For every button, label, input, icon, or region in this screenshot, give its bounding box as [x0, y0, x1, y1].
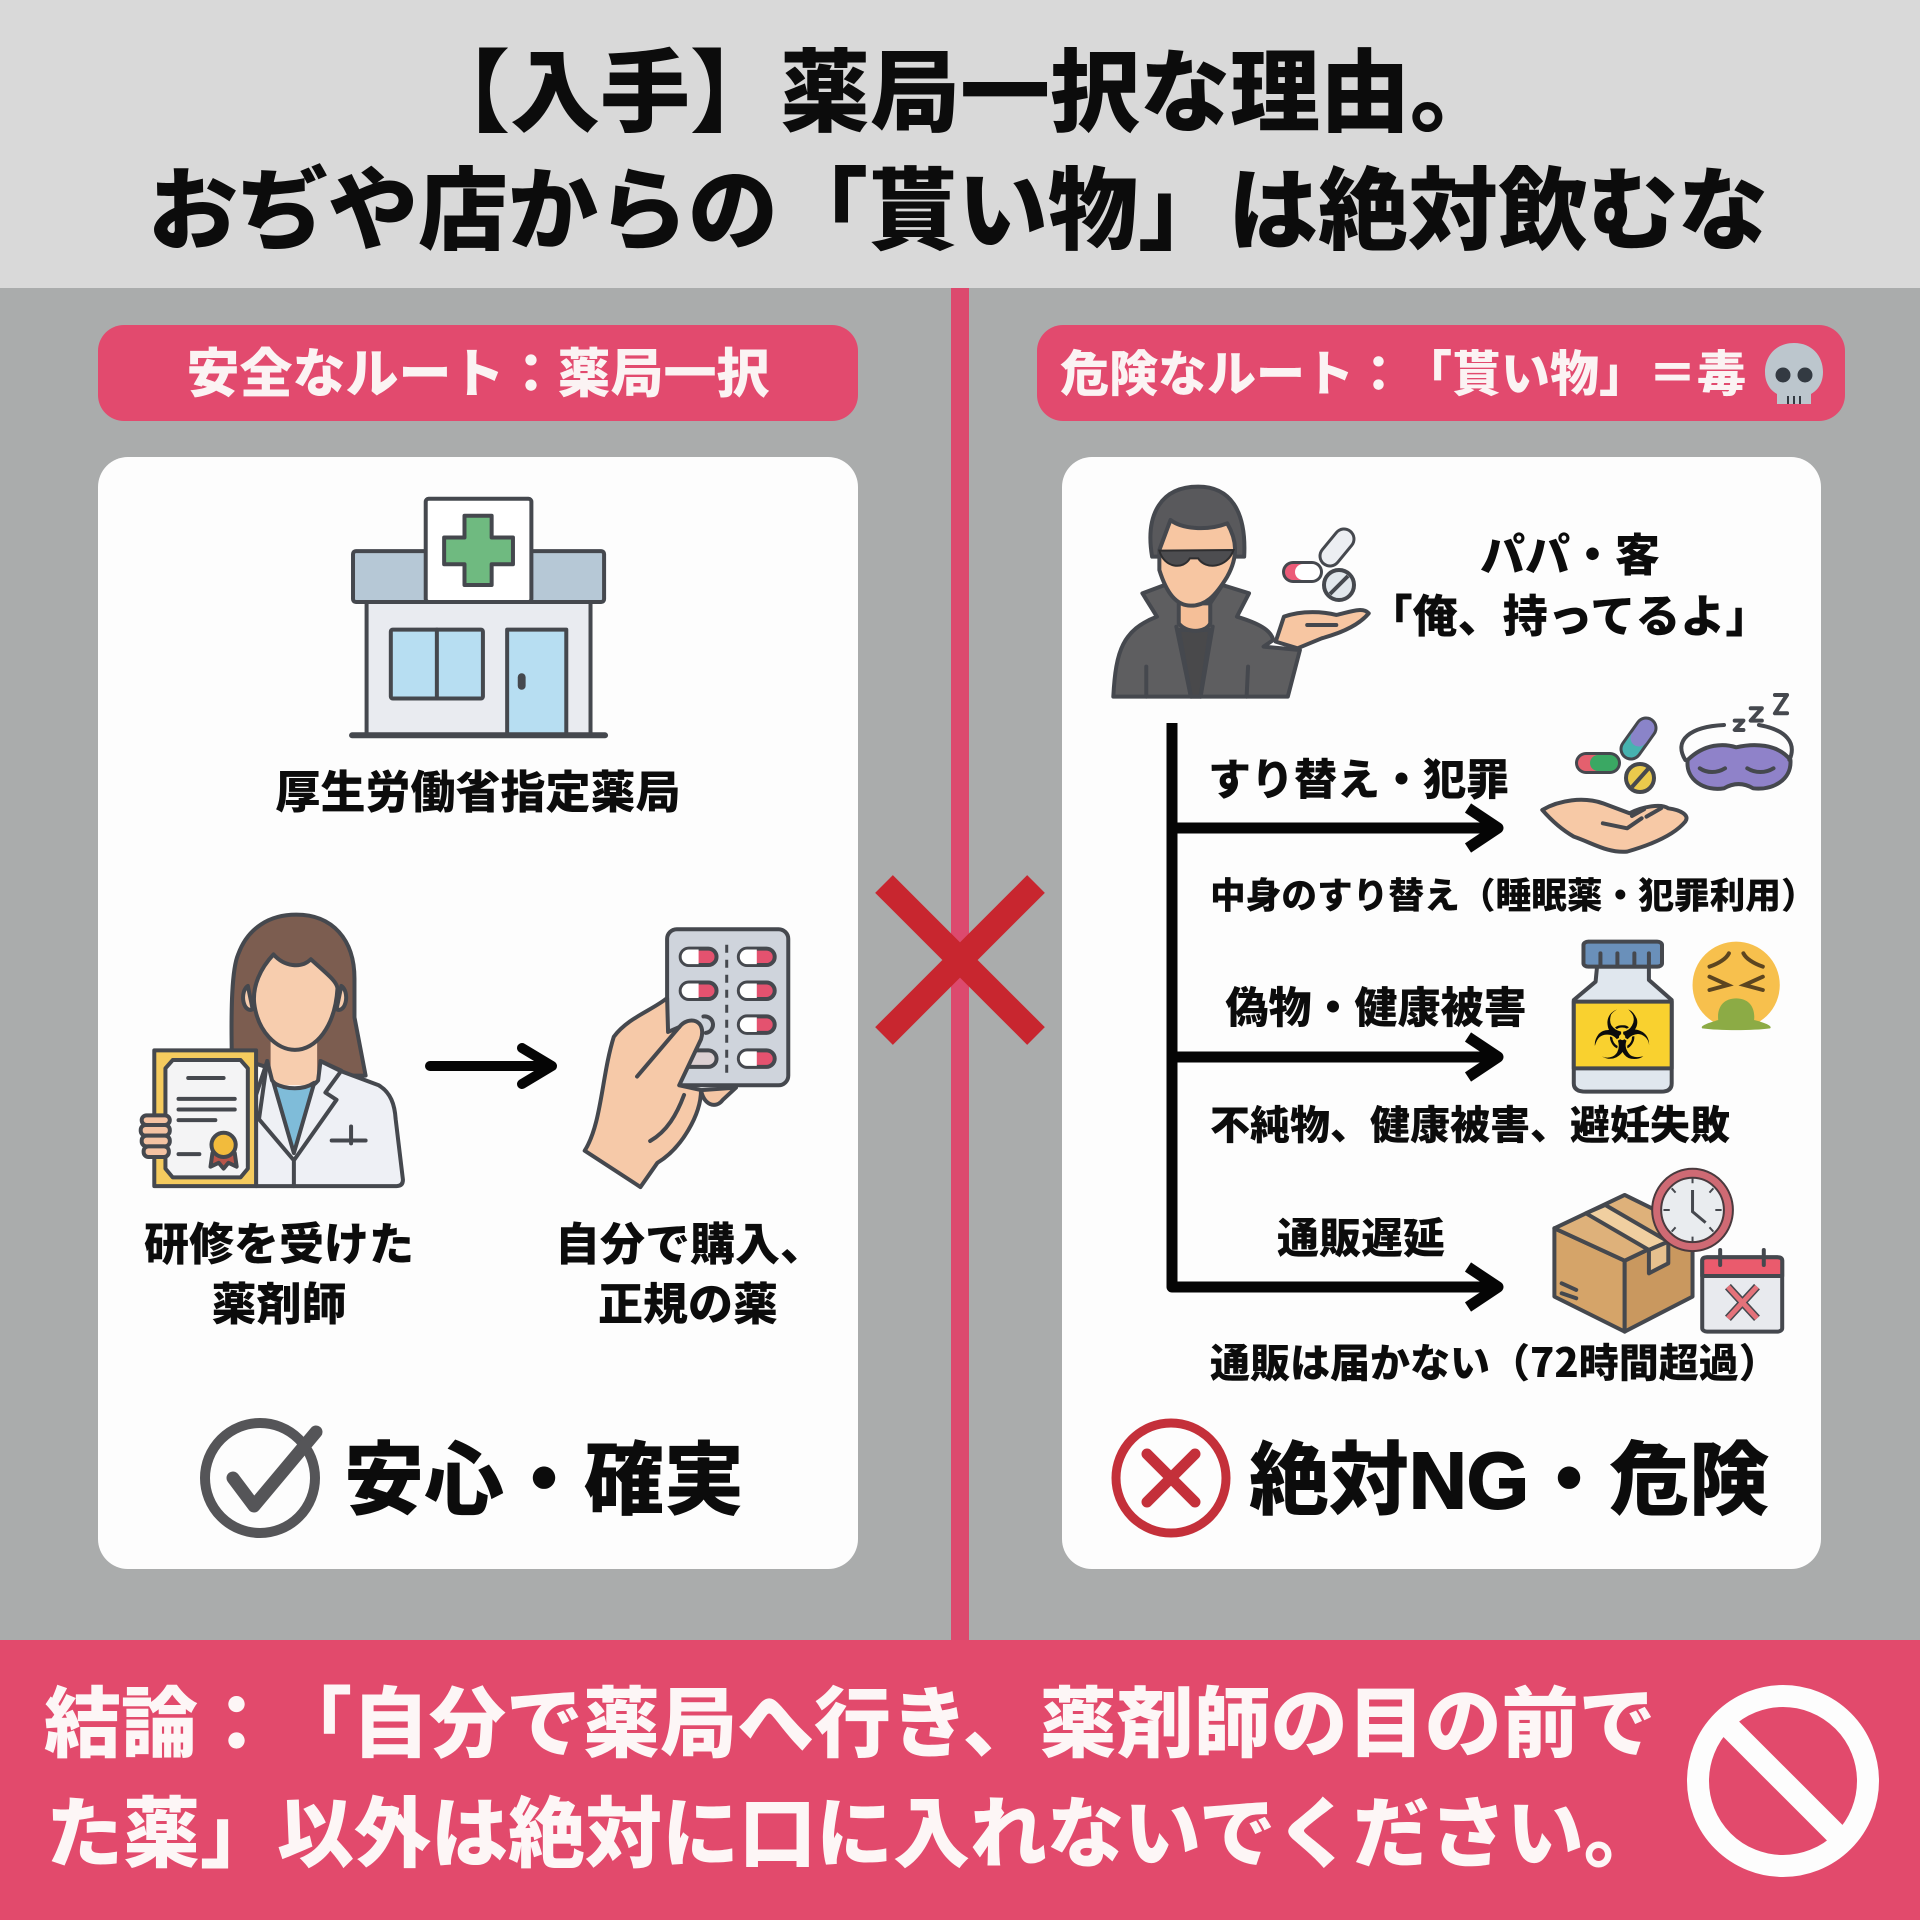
icon: cross in circle: [1116, 1423, 1226, 1533]
safe route heading pill: 安全なルート：薬局一択: [186, 345, 770, 404]
branch 2 heading: 偽物・健康被害: [1226, 985, 1526, 1033]
dealer quote: [1368, 530, 1770, 642]
verdict: danger: 絶対NG・危険: [1249, 1436, 1769, 1525]
icon: pills on hand and sleep mask: [1542, 695, 1792, 852]
label: pharmacist: 薬剤師: [211, 1279, 347, 1330]
danger route heading pill: 危険なルート：「貰い物」＝毒: [1060, 348, 1746, 402]
icon: hazard bottle: [1574, 942, 1672, 1092]
icon: skull: [1765, 343, 1823, 404]
header band with title: [0, 0, 1920, 288]
icon: prohibition sign: [1698, 1696, 1868, 1866]
danger route heading pill: [1037, 325, 1845, 421]
icon: dealer with pills: [1113, 487, 1369, 697]
conclusion banner: [0, 1640, 1920, 1920]
label: own purchase: 正規の薬: [598, 1279, 778, 1330]
label: pharmacist: 研修を受けた: [144, 1219, 414, 1270]
branch 3 heading: 通販遅延: [1277, 1215, 1445, 1262]
panel: dangerous route: [1037, 325, 1845, 1569]
branch 1 detail: 中身のすり替え（睡眠薬・犯罪利用）: [1210, 876, 1817, 916]
icon: pharmacy building: [352, 499, 605, 735]
icon: hand holding blister pack: [585, 929, 788, 1187]
safe route card: [98, 457, 858, 1569]
dealer quote: 「俺、持ってるよ」: [1368, 591, 1770, 642]
danger route card: [1062, 457, 1821, 1569]
label: pharmacist: [144, 1219, 414, 1330]
title line 2: おぢや店からの「貰い物」は絶対飲むな: [148, 162, 1768, 262]
icon: sick face emoji: [1693, 942, 1780, 1030]
icon: check mark: [205, 1423, 316, 1533]
safe route heading pill: [98, 325, 858, 421]
title line 1: 【入手】薬局一択な理由。: [420, 44, 1500, 144]
arrow: pharmacist to medicine: [430, 1048, 552, 1084]
big red cross: [884, 884, 1036, 1036]
conclusion text: [44, 1682, 1661, 1878]
pills above dealer hand: [1293, 539, 1354, 600]
conclusion text: た薬」以外は絶対に口に入れないでください。: [46, 1792, 1661, 1878]
central divider: [951, 288, 969, 1642]
icon: pharmacist with certificate: [141, 915, 403, 1186]
label: own purchase: 自分で購入、: [555, 1219, 825, 1270]
dealer quote: パパ・客: [1480, 530, 1660, 581]
branch 2 detail: 不純物、健康被害、避妊失敗: [1210, 1104, 1730, 1148]
branch 1 heading: すり替え・犯罪: [1208, 757, 1509, 805]
conclusion text: 結論：「自分で薬局へ行き、薬剤師の目の前で: [44, 1682, 1656, 1768]
icon: delayed parcel with clock and calendar: [1554, 1173, 1782, 1332]
panel: safe route: [98, 325, 858, 1569]
branch 3 detail: 通販は届かない（72時間超過）: [1210, 1331, 1779, 1389]
verdict: safe: 安心・確実: [344, 1436, 744, 1525]
icon: hazard bottle: ☣: [1592, 997, 1652, 1076]
label: own purchase: [555, 1219, 825, 1330]
branching arrows: [1172, 723, 1498, 1307]
pharmacy label: 厚生労働省指定薬局: [275, 767, 681, 818]
